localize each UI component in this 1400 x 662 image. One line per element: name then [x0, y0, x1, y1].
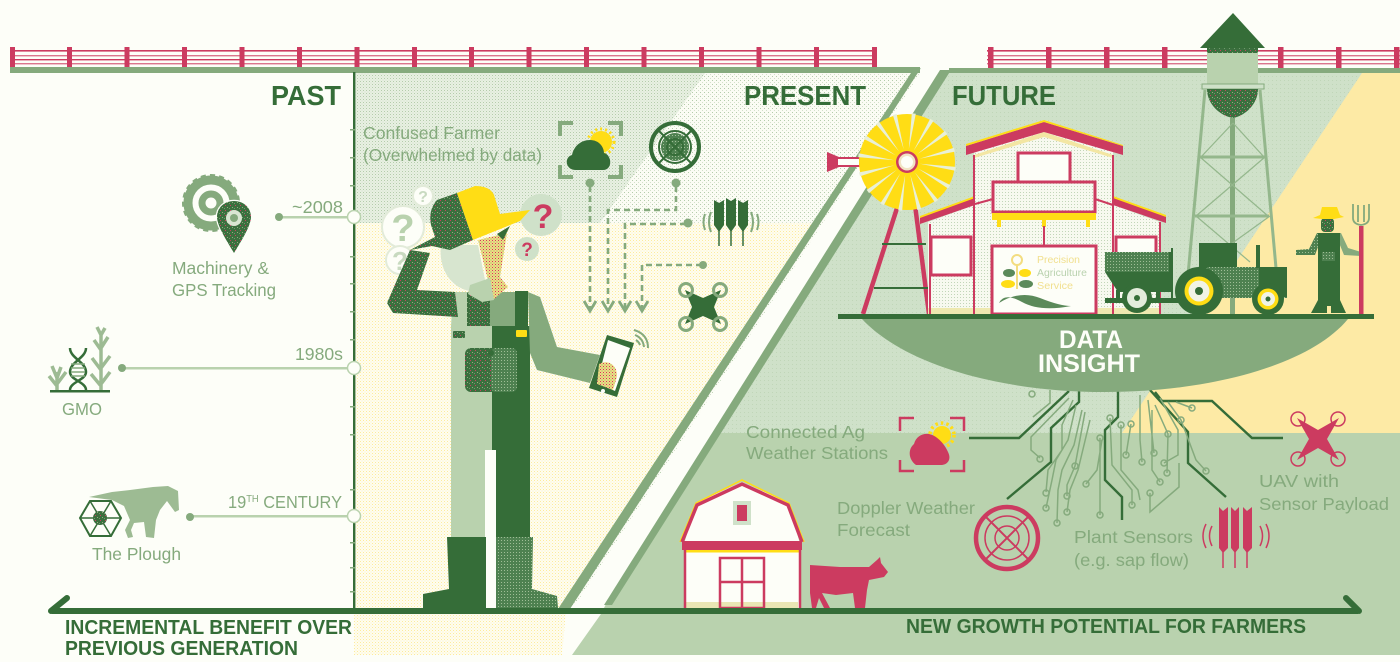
logo: precision agriculture service: [999, 254, 1087, 308]
connector arrows and nodes: [584, 178, 707, 311]
torso: [451, 292, 467, 326]
label: 19th century: 19: [228, 492, 247, 512]
head: [1321, 218, 1334, 232]
farmer: confused: [382, 186, 648, 610]
icon: crimson wheat sensor: [1203, 507, 1269, 568]
middle sign: [993, 182, 1095, 212]
diagonal band: present border: [556, 68, 921, 612]
icon: crimson weather station: [900, 418, 964, 471]
text: new growth potential: NEW GROWTH POTENTIAL FOR FARMERS: [906, 616, 1306, 638]
hat: [1313, 207, 1344, 219]
text: confused farmer: (Overwhelmed by data): [363, 145, 542, 165]
text: connected ag weather stations: Weather Stations: [746, 443, 888, 463]
blades: [859, 114, 955, 210]
heading: past: PAST: [271, 80, 341, 111]
text: confused farmer: Confused Farmer: [363, 123, 500, 143]
text: doppler weather forecast: Forecast: [837, 520, 910, 540]
icon: weather station: [560, 123, 621, 177]
text: confused farmer: [363, 123, 542, 165]
text: machinery and GPS: Machinery &: [172, 258, 269, 278]
upper window: [1018, 153, 1070, 182]
text: data insight: INSIGHT: [1038, 350, 1140, 378]
question marks: ?: [392, 246, 408, 276]
text: data insight: [1038, 326, 1140, 378]
phone: [589, 330, 648, 397]
text: connected ag weather stations: Connected Ag: [746, 422, 865, 442]
panel: future: [572, 70, 1400, 655]
text: UAV with sensor payload: UAV with: [1259, 471, 1339, 491]
icon: plough and horse: [80, 486, 179, 538]
marker: 1980s: [118, 362, 360, 374]
circuit roots: [969, 388, 1283, 526]
main wall: [974, 128, 1113, 314]
face: [441, 245, 487, 291]
logo: precision agriculture service: Agriculture: [1037, 267, 1087, 279]
service door sign: [992, 246, 1096, 314]
question marks: ?: [418, 189, 428, 206]
label: 19th century: CENTURY: [259, 492, 342, 512]
text: GMO: GMO: [62, 399, 102, 419]
tractor body: [1199, 243, 1237, 268]
text: incremental benefit: [65, 617, 353, 660]
icon: gear and GPS pin: [184, 176, 251, 253]
raised arm: [387, 250, 458, 317]
data insight bowl: [862, 319, 1348, 392]
farmhouse barn: [680, 480, 804, 609]
icon: crimson radar: [976, 507, 1038, 569]
small farmer with pitchfork: [1296, 204, 1369, 315]
icon: wheat sensor: [704, 198, 758, 246]
text: plant sensors: [1074, 527, 1193, 570]
panel: present: [354, 73, 920, 655]
icon: crimson UAV: [1291, 412, 1345, 466]
question marks: ?: [533, 198, 553, 236]
text: incremental benefit: PREVIOUS GENERATION: [65, 638, 298, 660]
question marks: ?: [521, 240, 533, 261]
dashed connectors: [590, 186, 702, 308]
text: the plough: The Plough: [92, 544, 181, 564]
fence: left: [10, 47, 920, 73]
pitchfork: [1359, 226, 1364, 315]
trailer: [1105, 252, 1171, 292]
water tower: [1188, 13, 1276, 314]
tower roof: [1200, 13, 1265, 48]
question marks: ?: [391, 208, 415, 250]
yellow awning: [992, 213, 1096, 227]
question marks: [382, 186, 562, 276]
heading: future: FUTURE: [952, 80, 1056, 111]
tank: [1207, 48, 1258, 85]
wing roofs: [920, 197, 975, 224]
legs: [451, 326, 492, 538]
text: UAV with sensor payload: [1259, 471, 1389, 514]
timeline: [118, 72, 360, 612]
right arm: [528, 292, 600, 383]
logo: precision agriculture service: Precision: [1037, 254, 1080, 266]
cap: [410, 193, 473, 250]
arms: [1296, 233, 1323, 255]
text: incremental benefit: INCREMENTAL BENEFIT OVER: [65, 617, 353, 639]
diagonal band: future border: [604, 70, 951, 605]
wings: [928, 205, 974, 314]
icon: GMO crops and DNA: [49, 327, 110, 392]
boots: [423, 537, 486, 608]
main barn: [920, 120, 1166, 314]
axis arrow: [51, 598, 1359, 614]
text: UAV with sensor payload: Sensor Payload: [1259, 494, 1389, 514]
ground line: farm platform: [838, 314, 1374, 319]
text: doppler weather forecast: [837, 498, 975, 540]
marker: 19th century: [186, 510, 360, 522]
side windows: [931, 237, 971, 275]
text: plant sensors: Plant Sensors: [1074, 527, 1193, 547]
windmill legs: [863, 205, 929, 314]
label: ~2008: ~2008: [292, 197, 343, 217]
logo: precision agriculture service: Service: [1037, 280, 1073, 292]
windmill: [827, 113, 956, 314]
text: connected ag weather stations: [746, 422, 888, 463]
text: doppler weather forecast: Doppler Weather: [837, 498, 975, 518]
heading: present: PRESENT: [744, 80, 866, 111]
icon: drone: [680, 284, 726, 330]
label: 19th century: TH: [246, 494, 259, 505]
fence: right: [949, 47, 1400, 73]
tail: [827, 152, 860, 172]
text: plant sensors: (e.g. sap flow): [1074, 550, 1189, 570]
icon: doppler radar: [651, 123, 699, 171]
text: data insight: DATA: [1059, 326, 1123, 354]
text: machinery and GPS: GPS Tracking: [172, 280, 276, 300]
tractor and trailer: [1105, 243, 1287, 315]
text: machinery and GPS: [172, 258, 276, 300]
pocket: [465, 348, 517, 392]
tower legs and braces: [1188, 90, 1276, 314]
label: 1980s: 1980s: [295, 344, 343, 364]
marker: 2008: [275, 210, 360, 224]
overalls: [1318, 233, 1340, 306]
main roof: [966, 122, 1123, 155]
icon: cow: [810, 557, 888, 608]
